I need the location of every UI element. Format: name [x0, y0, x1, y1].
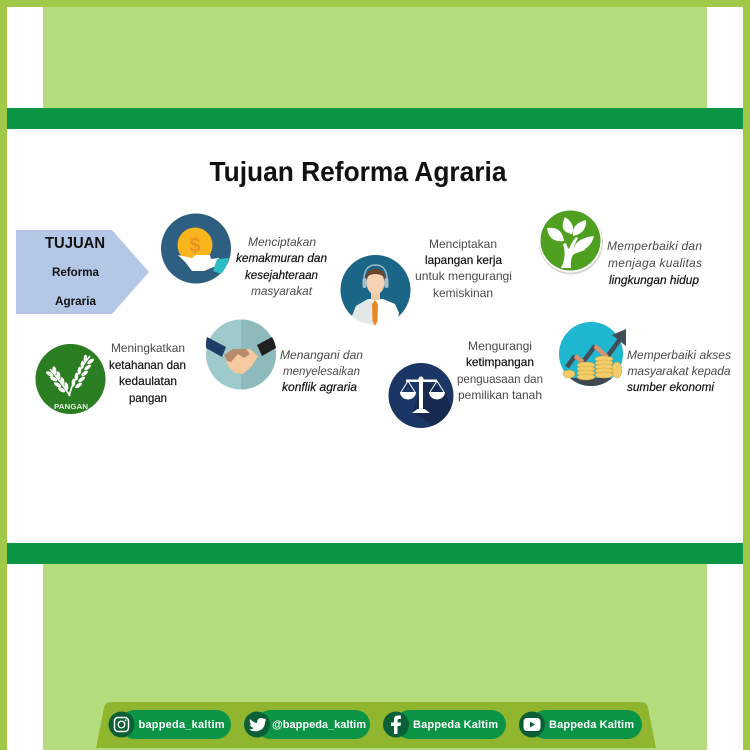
text: food security: ketahanan dan [109, 358, 186, 372]
icon: plant [539, 210, 603, 274]
text: employment: untuk mengurangi [415, 269, 512, 283]
text: prosperity: masyarakat [251, 284, 313, 298]
social: youtube: Bappeda Kaltim [549, 719, 634, 731]
social: instagram [108, 710, 231, 739]
text: inequality: pemilikan tanah [458, 388, 542, 402]
text: food security: Meningkatkan [111, 341, 185, 355]
icon: wheat [36, 344, 106, 414]
text: agrarian conflict: menyelesaikan [283, 364, 360, 378]
text: inequality: ketimpangan [466, 355, 534, 369]
text: employment [415, 237, 512, 300]
social: twitter [244, 710, 370, 739]
arrow text: Reforma [52, 265, 99, 279]
text: inequality: Mengurangi [468, 339, 532, 353]
arrow panel: Tujuan Reforma Agraria [16, 230, 149, 314]
text: agrarian conflict: konflik agraria [282, 380, 357, 394]
social: facebook [383, 710, 506, 739]
text: economic access: masyarakat kepada [628, 364, 731, 378]
text: employment: lapangan kerja [425, 253, 502, 267]
text: prosperity: Menciptakan [248, 235, 316, 249]
text: inequality [457, 339, 543, 402]
title: Tujuan Reforma Agraria [210, 156, 507, 187]
text: economic access: Memperbaiki akses [627, 348, 731, 362]
text: employment: Menciptakan [429, 237, 497, 251]
text: agrarian conflict: Menangani dan [280, 348, 363, 362]
text: environment [607, 239, 702, 287]
icon: scales [388, 363, 454, 428]
text: agrarian conflict [280, 348, 363, 394]
text: prosperity: kesejahteraan [245, 268, 318, 282]
icon: coins and growth arrow [559, 322, 626, 386]
text: employment: kemiskinan [433, 286, 493, 300]
top light green panel [43, 7, 707, 108]
bottom dark green band [7, 543, 743, 564]
arrow text [45, 235, 105, 308]
text: food security: pangan [129, 391, 167, 405]
social: twitter: @bappeda_kaltim [272, 719, 366, 731]
icon: wheat: PANGAN [54, 404, 88, 411]
text: environment: lingkungan hidup [609, 273, 699, 287]
bottom light green panel [43, 564, 707, 750]
text: food security [109, 341, 186, 405]
text: environment: menjaga kualitas [608, 256, 702, 270]
text: food security: kedaulatan [119, 374, 177, 388]
text: prosperity: kemakmuran dan [236, 251, 327, 265]
top dark green band [7, 108, 743, 129]
icon: coin in hand: $ [189, 235, 201, 257]
arrow text: TUJUAN [45, 235, 105, 252]
text: prosperity [236, 235, 327, 298]
icon: handshake [206, 320, 276, 390]
icon: coin in hand [161, 214, 231, 284]
social: youtube [519, 710, 642, 739]
icon: worker with headset [340, 255, 410, 330]
text: environment: Memperbaiki dan [607, 239, 702, 253]
arrow text: Agraria [55, 294, 96, 308]
social: facebook: Bappeda Kaltim [413, 719, 498, 731]
text: economic access: sumber ekonomi [627, 380, 714, 394]
footer bar [96, 702, 656, 748]
text: economic access [627, 348, 731, 394]
social: instagram: bappeda_kaltim [138, 719, 225, 731]
text: inequality: penguasaan dan [457, 372, 543, 386]
